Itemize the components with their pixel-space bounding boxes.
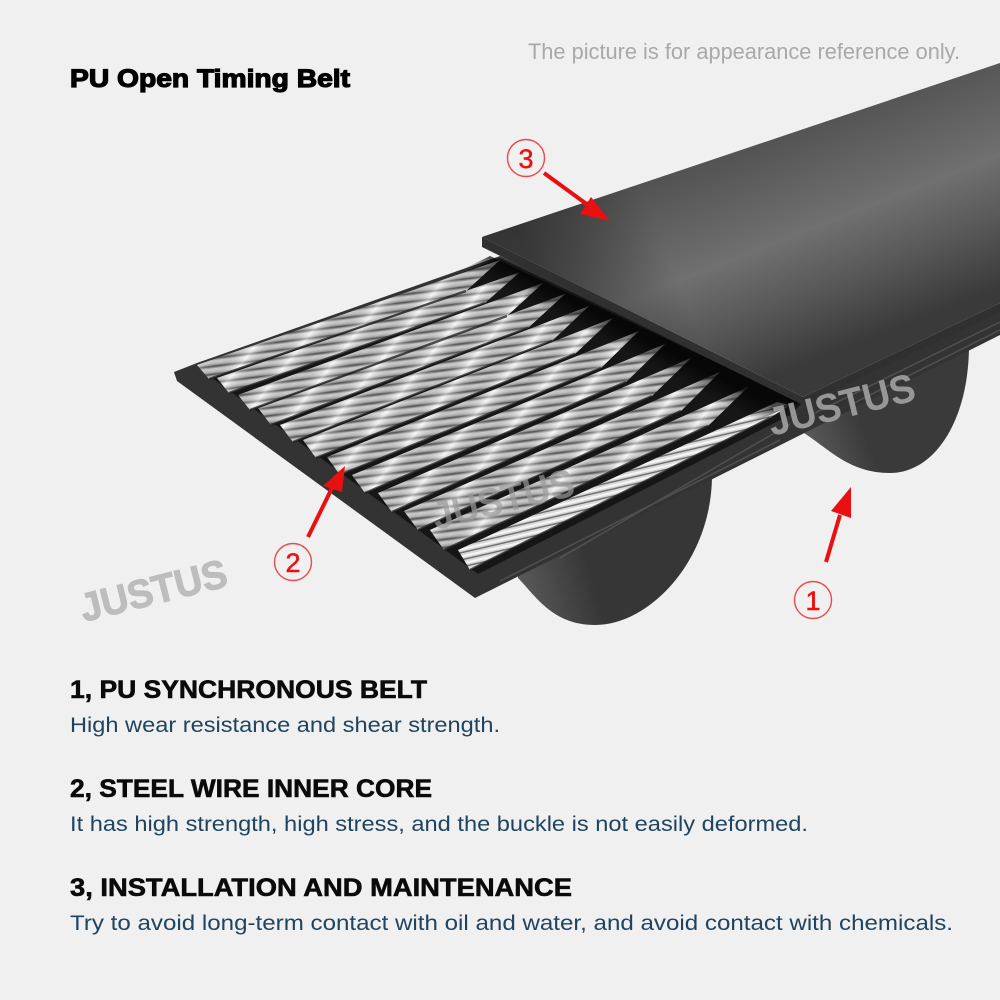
- arrow 3: [544, 173, 610, 221]
- belt illustration: [174, 63, 1000, 625]
- cord 2: [217, 272, 520, 393]
- rear tooth: [804, 345, 969, 473]
- cord 1: [197, 260, 500, 379]
- heading 3: 3, INSTALLATION AND MAINTENANCE: [70, 874, 572, 902]
- watermark centre: JUSTUS: [428, 461, 579, 539]
- cord 8: [352, 344, 665, 493]
- top plate side: [482, 237, 1000, 405]
- number 2: 2: [285, 548, 301, 578]
- dark channel under wires: [204, 258, 803, 574]
- watermark left: JUSTUS: [76, 552, 232, 631]
- section 1: [70, 676, 500, 737]
- front tooth: [518, 475, 712, 625]
- top plate surface: [482, 63, 1000, 397]
- description 1: High wear resistance and shear strength.: [70, 714, 500, 737]
- shadow at wire ends: [400, 256, 800, 445]
- cord 6: [303, 318, 613, 458]
- note: appearance reference: The picture is for appearance reference only.: [528, 39, 960, 64]
- heading 1: 1, PU SYNCHRONOUS BELT: [70, 676, 427, 704]
- callout 2: [274, 466, 345, 580]
- cord 12: [458, 402, 790, 570]
- cord 9: [378, 358, 691, 512]
- arrow 2: [308, 466, 345, 537]
- cord 11: [430, 387, 748, 550]
- cord 7: [327, 331, 639, 475]
- streaked underside band: [500, 322, 1000, 581]
- cord 10: [404, 372, 720, 530]
- number 3: 3: [518, 144, 534, 174]
- description 3: Try to avoid long-term contact with oil and water, and avoid contact with chemicals.: [70, 912, 953, 935]
- number 1: 1: [805, 586, 821, 616]
- cord 3: [238, 283, 543, 410]
- base layer: [174, 256, 1000, 598]
- cord 4: [258, 294, 565, 425]
- heading 2: 2, STEEL WIRE INNER CORE: [70, 775, 432, 803]
- cord highlight bands: [197, 260, 748, 550]
- callout 1: [794, 487, 851, 618]
- arrow 1: [826, 487, 851, 562]
- description 2: It has high strength, high stress, and the buckle is not easily deformed.: [70, 813, 808, 836]
- callout 3: [508, 140, 610, 221]
- steel wire cords: [197, 260, 790, 570]
- section 3: [70, 874, 953, 935]
- watermark right: JUSTUS: [764, 366, 920, 445]
- title: PU Open Timing Belt: [70, 65, 351, 93]
- cord shadow lines: [209, 291, 770, 570]
- cord 5: [280, 306, 589, 442]
- section 2: [70, 775, 808, 836]
- plate cut-end shade: [482, 63, 1000, 397]
